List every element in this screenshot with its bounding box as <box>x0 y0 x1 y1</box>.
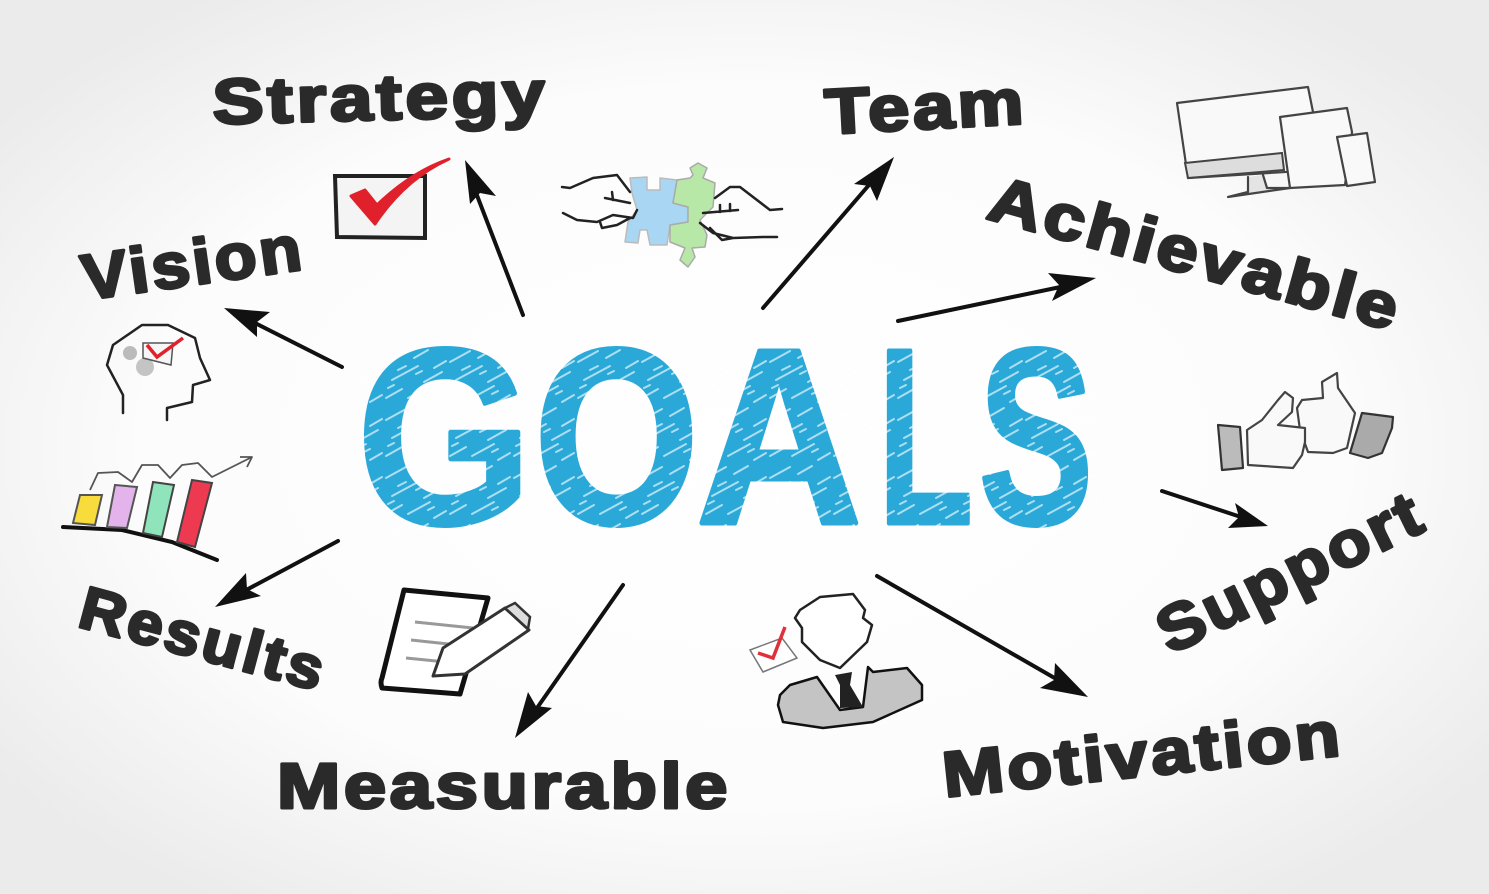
title: GOALS: O <box>534 297 699 576</box>
title: GOALS: S <box>979 297 1093 576</box>
arrow: to Support <box>1162 491 1268 528</box>
arrow: to Results <box>215 541 338 607</box>
label: Strategy: Strategy <box>211 57 549 138</box>
label: Vision: Vision <box>77 211 309 314</box>
label: Achievable: Achievable <box>981 162 1410 345</box>
icon: checkbox with red tick <box>335 159 449 238</box>
arrow: to Measurable <box>515 585 623 738</box>
icon: person with checkbox <box>750 594 922 728</box>
icon: thumbs up <box>1218 373 1393 470</box>
title: GOALS: A <box>696 297 862 576</box>
label: Team: Team <box>823 66 1028 148</box>
arrow: to Vision <box>224 308 342 367</box>
icon: monitor and devices <box>1177 87 1375 197</box>
label: Motivation: Motivation <box>939 697 1346 811</box>
label: Results: Results <box>73 574 334 704</box>
title: GOALS: G <box>357 297 532 576</box>
title: GOALS: L <box>878 297 973 576</box>
arrow: to Achievable <box>898 273 1096 321</box>
arrow: to Motivation <box>877 576 1088 697</box>
label: Measurable: Measurable <box>277 750 731 822</box>
arrow: to Strategy <box>465 160 523 315</box>
icon: bar chart <box>63 457 252 560</box>
icon: document and pencil <box>381 590 530 694</box>
title: GOALS <box>355 297 1100 576</box>
label: Support: Support <box>1145 476 1436 668</box>
icon: head with gears and tick <box>107 325 210 420</box>
arrow: to Team <box>763 157 894 308</box>
icon: hands with puzzle pieces <box>562 163 782 267</box>
